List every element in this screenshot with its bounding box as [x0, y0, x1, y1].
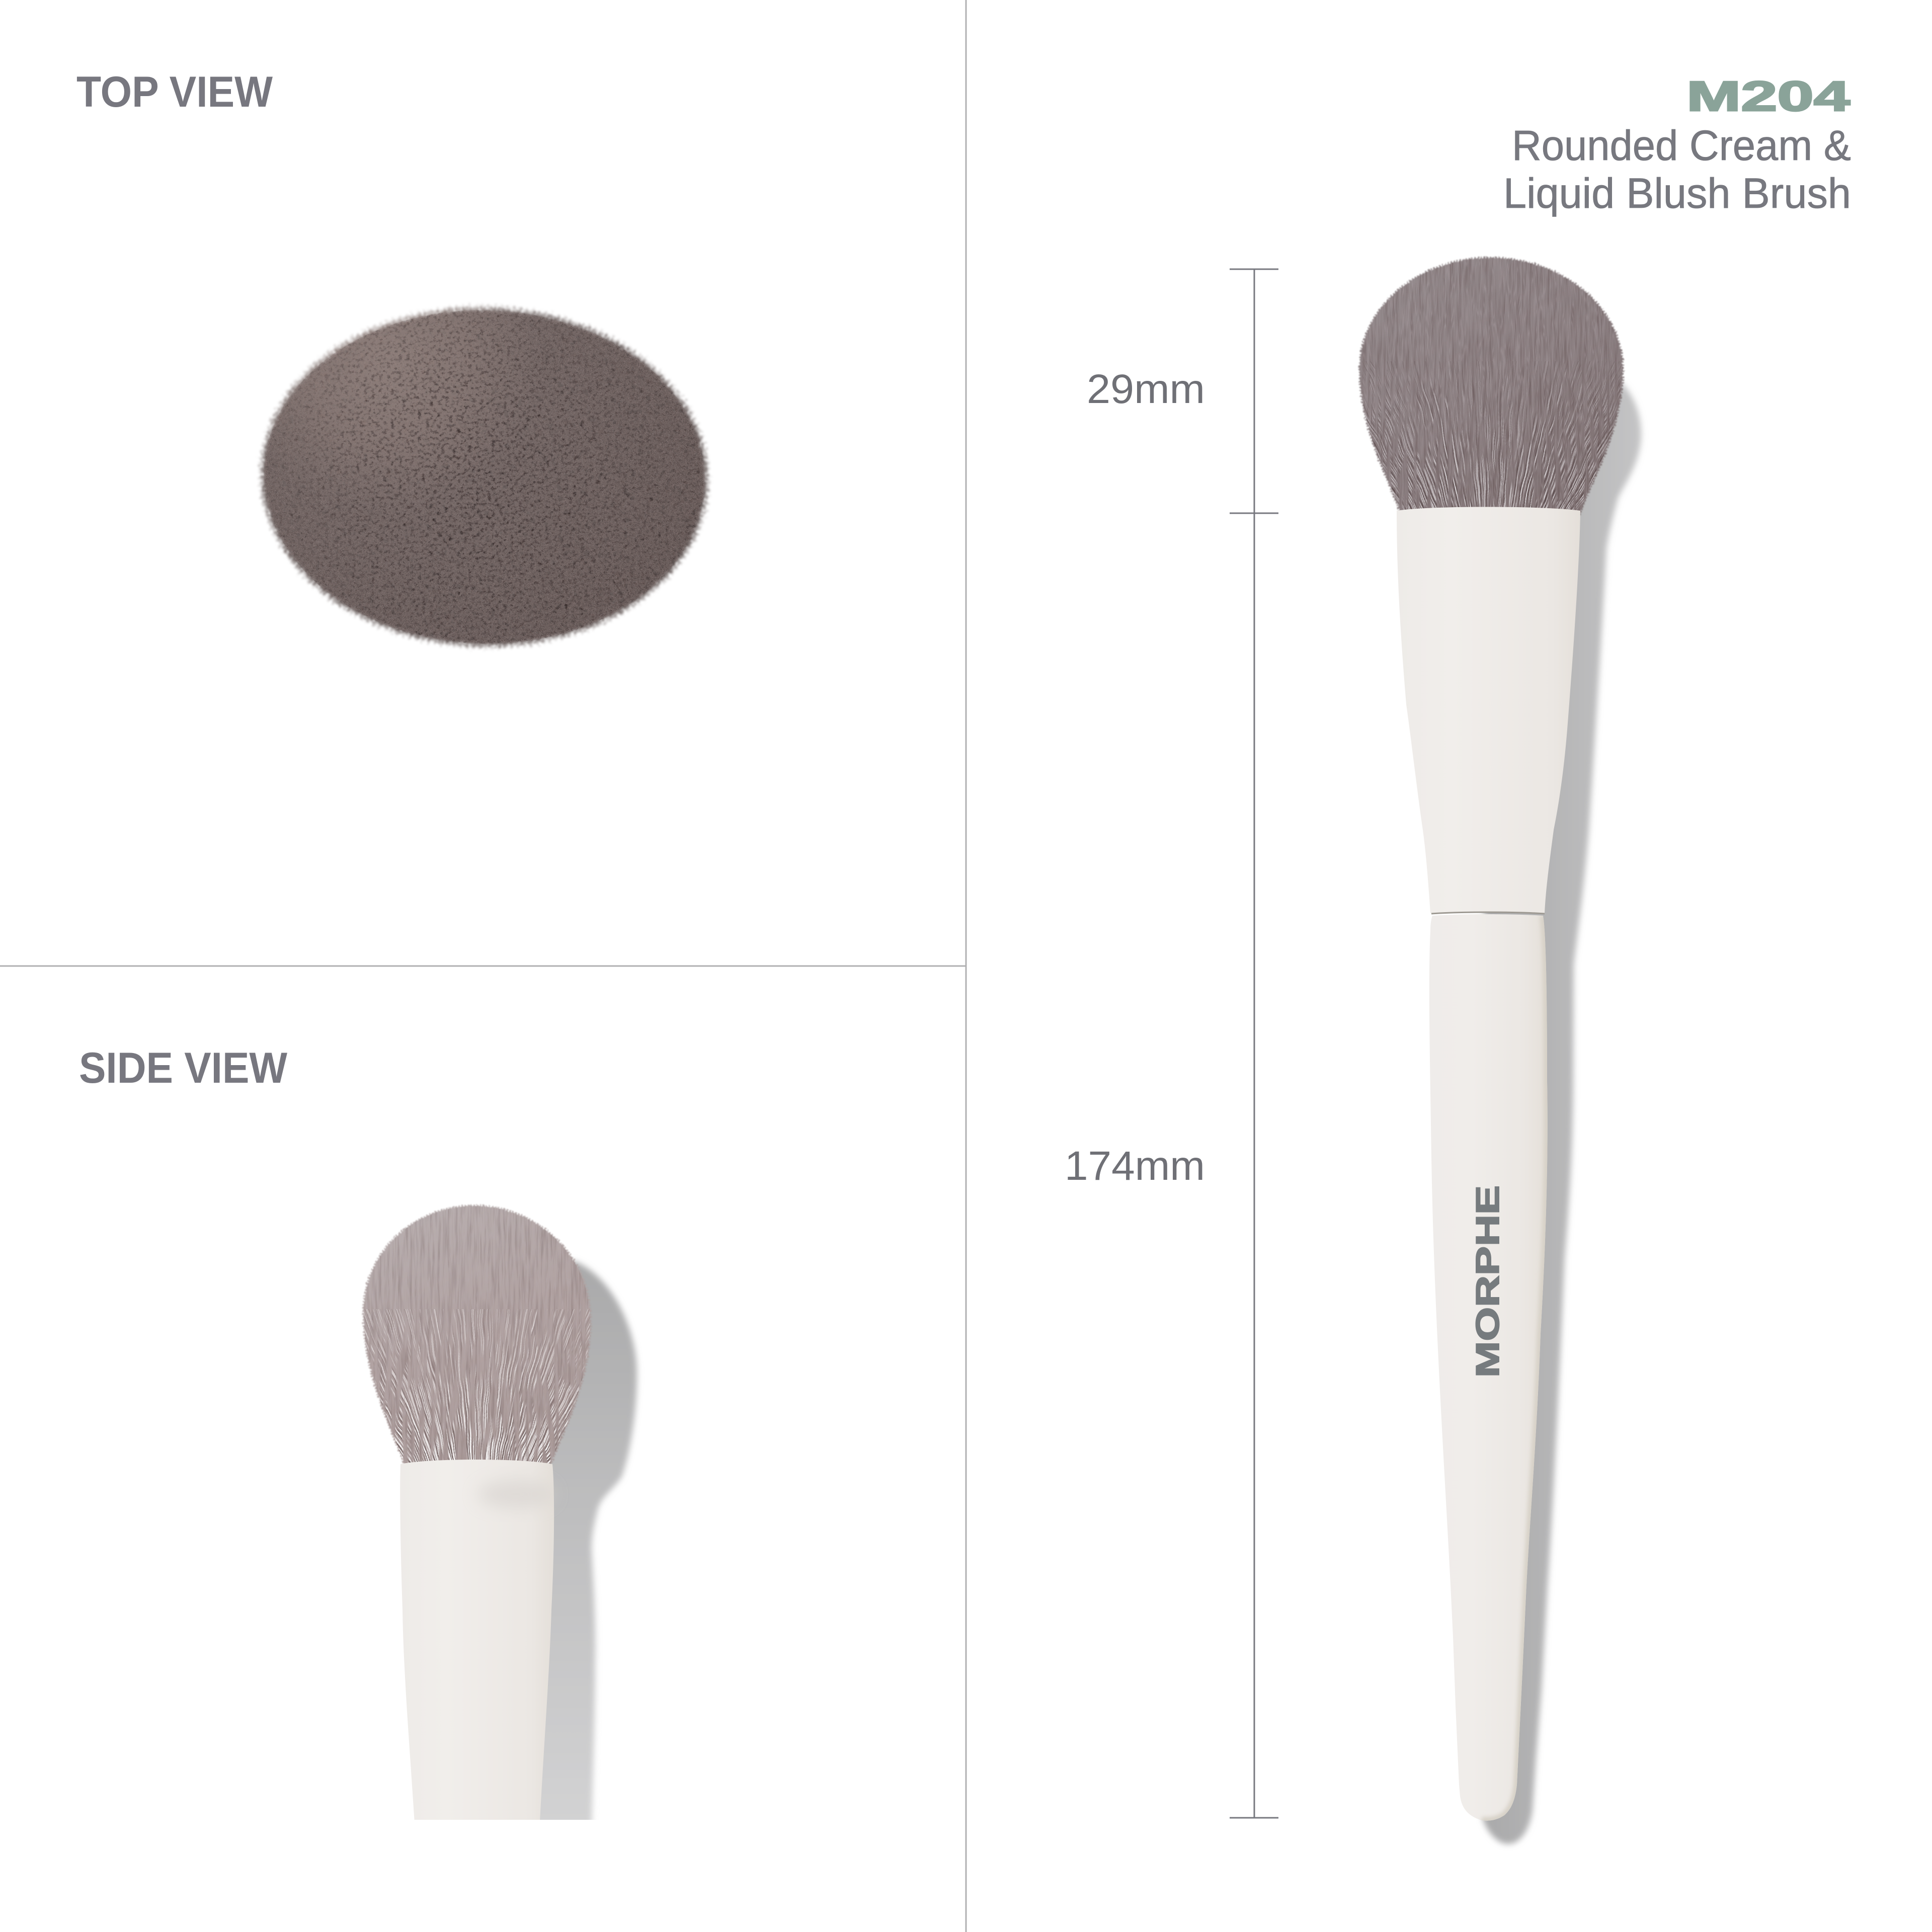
dimension bracket [1230, 269, 1278, 1818]
panel dividers [0, 0, 966, 1932]
heading: side view: SIDE VIEW [79, 1044, 288, 1092]
panel: top view [76, 76, 711, 651]
product name: Rounded Cream & [1512, 122, 1851, 169]
shadow: side view brush [503, 1261, 637, 1836]
brand mark on handle: MORPHE [1469, 1185, 1506, 1378]
handle beige rim [1482, 916, 1548, 1821]
ferrule: side view [400, 1460, 554, 1831]
dimension label: bristle length: 29mm [1087, 366, 1205, 412]
ferrule [1397, 507, 1580, 913]
product name [1503, 122, 1851, 217]
handle [1429, 914, 1548, 1821]
bristles: side view [236, 1197, 719, 1816]
shadow: full brush [1483, 352, 1641, 1844]
ferrule crease shadow [478, 1480, 553, 1508]
photo: full brush [1230, 252, 1753, 1844]
dimension label: handle length: 174mm [1065, 1143, 1205, 1189]
photo: brush close-up from side [361, 1203, 640, 1820]
heading: top view: TOP VIEW [76, 68, 273, 116]
photo: brush head from above [257, 303, 711, 651]
ferrule joint line [1431, 912, 1545, 914]
panel: full brush with dimensions [1065, 72, 1851, 1844]
panel: side view [80, 1053, 640, 1820]
product code: M204 [1686, 72, 1850, 120]
product name: Liquid Blush Brush [1503, 170, 1851, 217]
bristles: full brush [1230, 252, 1753, 911]
